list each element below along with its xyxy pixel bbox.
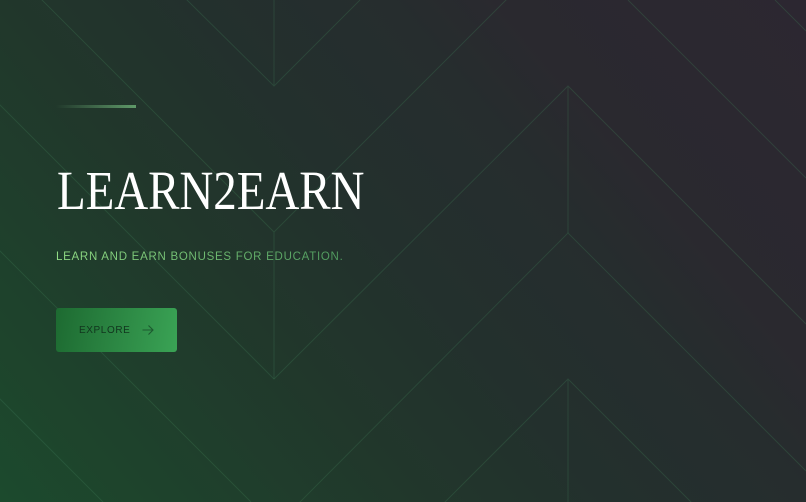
subtitle: LEARN AND EARN BONUSES FOR EDUCATION. xyxy=(56,251,344,263)
icon: right arrow xyxy=(142,325,154,335)
button: explore xyxy=(56,308,177,352)
button label: EXPLORE xyxy=(79,325,130,336)
title: LEARN2EARN xyxy=(57,160,364,221)
accent bar xyxy=(56,105,136,108)
